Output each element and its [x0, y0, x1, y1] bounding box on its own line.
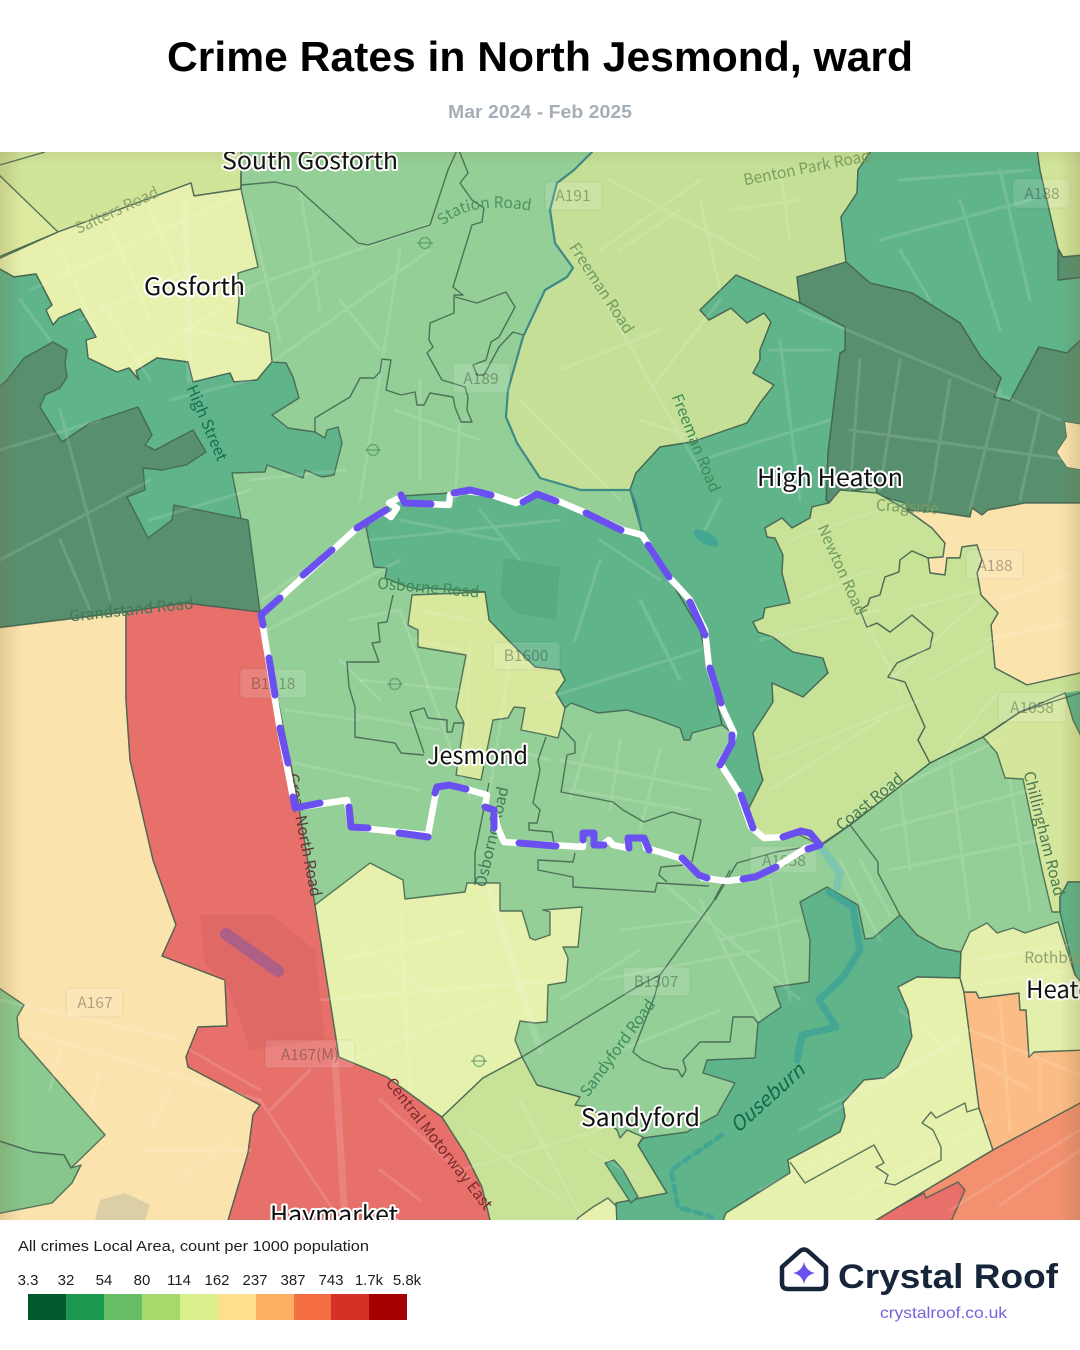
river: Ouseburn — [506, 152, 860, 1217]
road shields: A191 — [555, 184, 591, 206]
legend title: All crimes Local Area, count per 1000 population — [18, 1238, 369, 1255]
place labels: Haymarket — [270, 1195, 398, 1230]
road shields: B1307 — [634, 970, 678, 992]
metro station markers — [365, 238, 487, 1066]
legend values: 3.3 — [18, 1272, 38, 1289]
road labels: High Street — [182, 381, 233, 464]
road labels: Salters Road — [71, 180, 162, 239]
road labels: Grandstand Road — [68, 592, 195, 626]
road shields: B1318 — [251, 672, 295, 694]
place labels — [144, 141, 1080, 1230]
road labels: Chillingham Road — [1019, 769, 1071, 898]
road shields: A188 — [1024, 182, 1060, 204]
logo: Crystal Roof — [782, 1250, 1059, 1322]
legend values: 80 — [134, 1272, 150, 1289]
title: Crime Rates in North Jesmond, ward — [167, 33, 913, 80]
legend — [18, 1238, 422, 1320]
road labels: Benton Park Road — [741, 144, 872, 190]
road shields — [66, 179, 1070, 1068]
road labels: Sandyford Road — [574, 994, 660, 1101]
wordmark: Crystal Roof — [838, 1258, 1059, 1296]
road labels: Freeman Road — [667, 390, 726, 495]
icon: house with star — [782, 1250, 826, 1289]
legend values: 32 — [58, 1272, 74, 1289]
legend colour scale — [28, 1294, 407, 1320]
road shields: A188 — [977, 554, 1013, 576]
map edge shading — [0, 152, 1080, 1220]
road shields: A167(M) — [281, 1043, 339, 1065]
road shields: A1058 — [1010, 696, 1054, 718]
legend values: 54 — [96, 1272, 112, 1289]
road labels: Central Motorway East — [381, 1073, 498, 1214]
road labels: Station Road — [438, 196, 531, 224]
legend values: 162 — [204, 1272, 230, 1289]
website link: crystalroof.co.uk — [880, 1305, 1008, 1322]
road labels: Great North Road — [282, 771, 328, 898]
road shields: A167 — [77, 991, 113, 1013]
road labels: Coast Road — [831, 767, 908, 835]
place labels: Jesmond — [427, 736, 528, 771]
rail line on red area — [226, 934, 278, 971]
choropleth regions — [0, 148, 1080, 1224]
North Jesmond ward outline — [261, 490, 820, 881]
road labels: Cragside — [875, 493, 939, 519]
road shields: A1058 — [762, 849, 806, 871]
legend values: 387 — [280, 1272, 306, 1289]
road labels: Newton Road — [813, 521, 872, 619]
legend values: 5.8k — [393, 1272, 422, 1289]
road shields: A189 — [463, 367, 499, 389]
legend values: 114 — [167, 1272, 191, 1289]
road shields: B1600 — [504, 644, 548, 666]
park and block patches — [95, 558, 560, 1220]
pond — [694, 529, 718, 547]
road labels: Ouseburn — [722, 1055, 811, 1138]
road labels: Osborne Road — [469, 784, 513, 889]
road labels: Osborne Road — [377, 572, 480, 602]
ward and neighbourhood boundary lines — [0, 148, 1080, 1185]
subtitle: date range: Mar 2024 - Feb 2025 — [448, 102, 632, 122]
legend values: 237 — [242, 1272, 268, 1289]
road network — [0, 170, 1080, 1220]
place labels: High Heaton — [757, 458, 903, 493]
legend values — [18, 1272, 422, 1289]
place labels: South Gosforth — [222, 141, 398, 176]
place labels: Sandyford — [581, 1098, 700, 1133]
road labels — [70, 152, 1080, 1211]
road labels: Freeman Road — [564, 238, 640, 338]
place labels: Gosforth — [144, 267, 245, 302]
legend values: 743 — [318, 1272, 344, 1289]
legend values: 1.7k — [355, 1272, 384, 1289]
